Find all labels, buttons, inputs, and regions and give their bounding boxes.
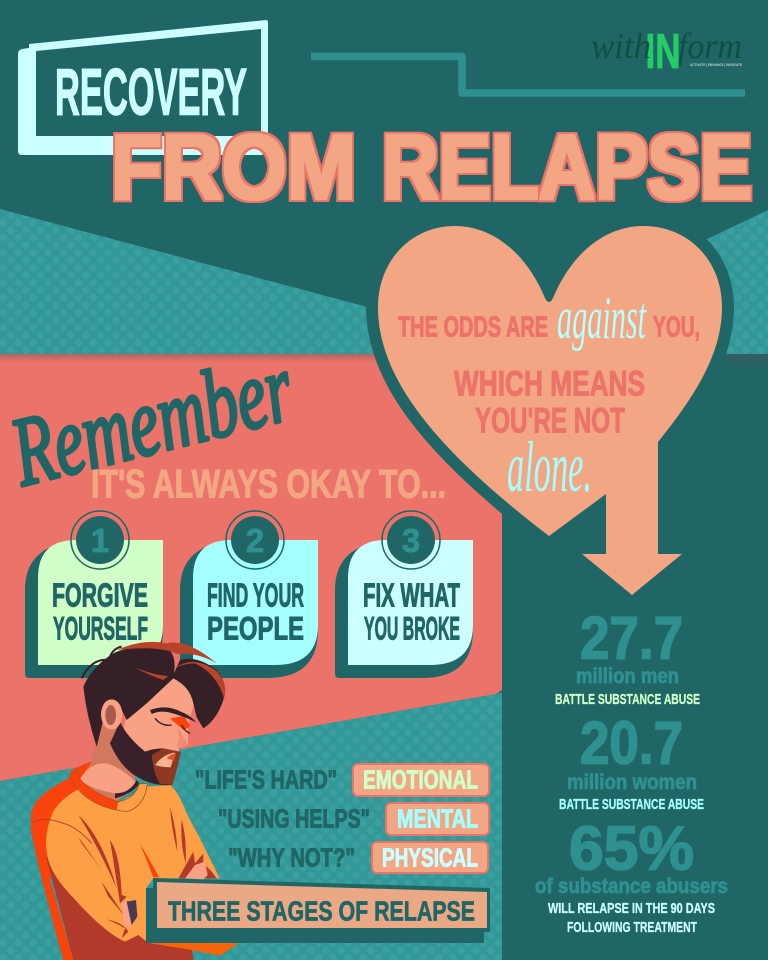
stat: 27.7 million men: 27.7: [580, 604, 683, 672]
banner: three stages of relapse: THREE STAGES OF RELAPSE: [168, 896, 475, 926]
logo: ACTIVATE | ENHANCE | INNOVATE: [690, 63, 743, 67]
subheading: IT'S ALWAYS OKAY TO...: [91, 462, 446, 506]
stage label: physical: PHYSICAL: [382, 842, 478, 872]
card 1: forgive yourself: YOURSELF: [53, 610, 148, 646]
decorative stepped line: [311, 56, 745, 93]
banner: three stages of relapse: [146, 878, 490, 943]
card 3: fix what you broke: YOU BROKE: [364, 610, 460, 646]
stage label: emotional: EMOTIONAL: [363, 764, 478, 794]
card 2: find your people: FIND YOUR: [207, 576, 304, 614]
stat: 65% relapse: FOLLOWING TREATMENT: [567, 919, 697, 936]
card 2: find your people: [180, 511, 318, 678]
heart with arrow: [378, 226, 722, 595]
recovery frame and heading: [18, 20, 268, 155]
heart message: against: [557, 285, 647, 351]
recovery frame and heading: RECOVERY: [55, 54, 247, 128]
stat: 27.7 million men: [555, 604, 700, 708]
stat: 20.7 million women: million women: [567, 771, 697, 794]
card 3: fix what you broke: 3: [402, 522, 420, 559]
heart message: [398, 285, 700, 507]
stat: 65% relapse: of substance abusers: [535, 875, 728, 898]
stage quotes: "WHY NOT?": [228, 842, 355, 872]
stat: 20.7 million women: 20.7: [580, 710, 683, 776]
card 3: fix what you broke: FIX WHAT: [363, 576, 460, 614]
logo: IN: [646, 25, 680, 79]
stat: 27.7 million men: BATTLE SUBSTANCE ABUSE: [555, 691, 700, 708]
heart message: alone.: [507, 427, 592, 507]
remember heading: Remember: [1, 334, 303, 508]
stage quotes: "USING HELPS": [218, 804, 370, 834]
logo: [591, 25, 743, 79]
logo: with: [591, 26, 651, 66]
heart message: YOU'RE NOT: [475, 402, 625, 440]
stat: 27.7 million men: million men: [576, 665, 679, 688]
heart message: THE ODDS ARE: [398, 312, 548, 344]
stage label: mental: MENTAL: [397, 804, 478, 834]
illustration: man with crossed arms: [31, 642, 238, 960]
stat: 20.7 million women: BATTLE SUBSTANCE ABUSE: [559, 796, 704, 813]
card 1: forgive yourself: 1: [91, 522, 109, 559]
card 2: find your people: 2: [246, 522, 264, 559]
logo: form: [678, 26, 742, 66]
card 1: forgive yourself: FORGIVE: [52, 576, 148, 614]
stat: 20.7 million women: [559, 710, 704, 813]
card 3: fix what you broke: [335, 511, 473, 678]
card 1: forgive yourself: [25, 511, 163, 678]
stage quotes: "LIFE'S HARD": [195, 764, 337, 794]
title: from relapse: [111, 116, 752, 218]
heart message: YOU,: [653, 312, 700, 344]
stage quotes: [195, 764, 370, 872]
stat: 65% relapse: 65%: [569, 814, 694, 884]
title: from relapse: FROM: [111, 116, 356, 218]
heart message: WHICH MEANS: [454, 364, 645, 404]
stat: 65% relapse: [535, 814, 728, 936]
card 2: find your people: PEOPLE: [207, 610, 304, 646]
